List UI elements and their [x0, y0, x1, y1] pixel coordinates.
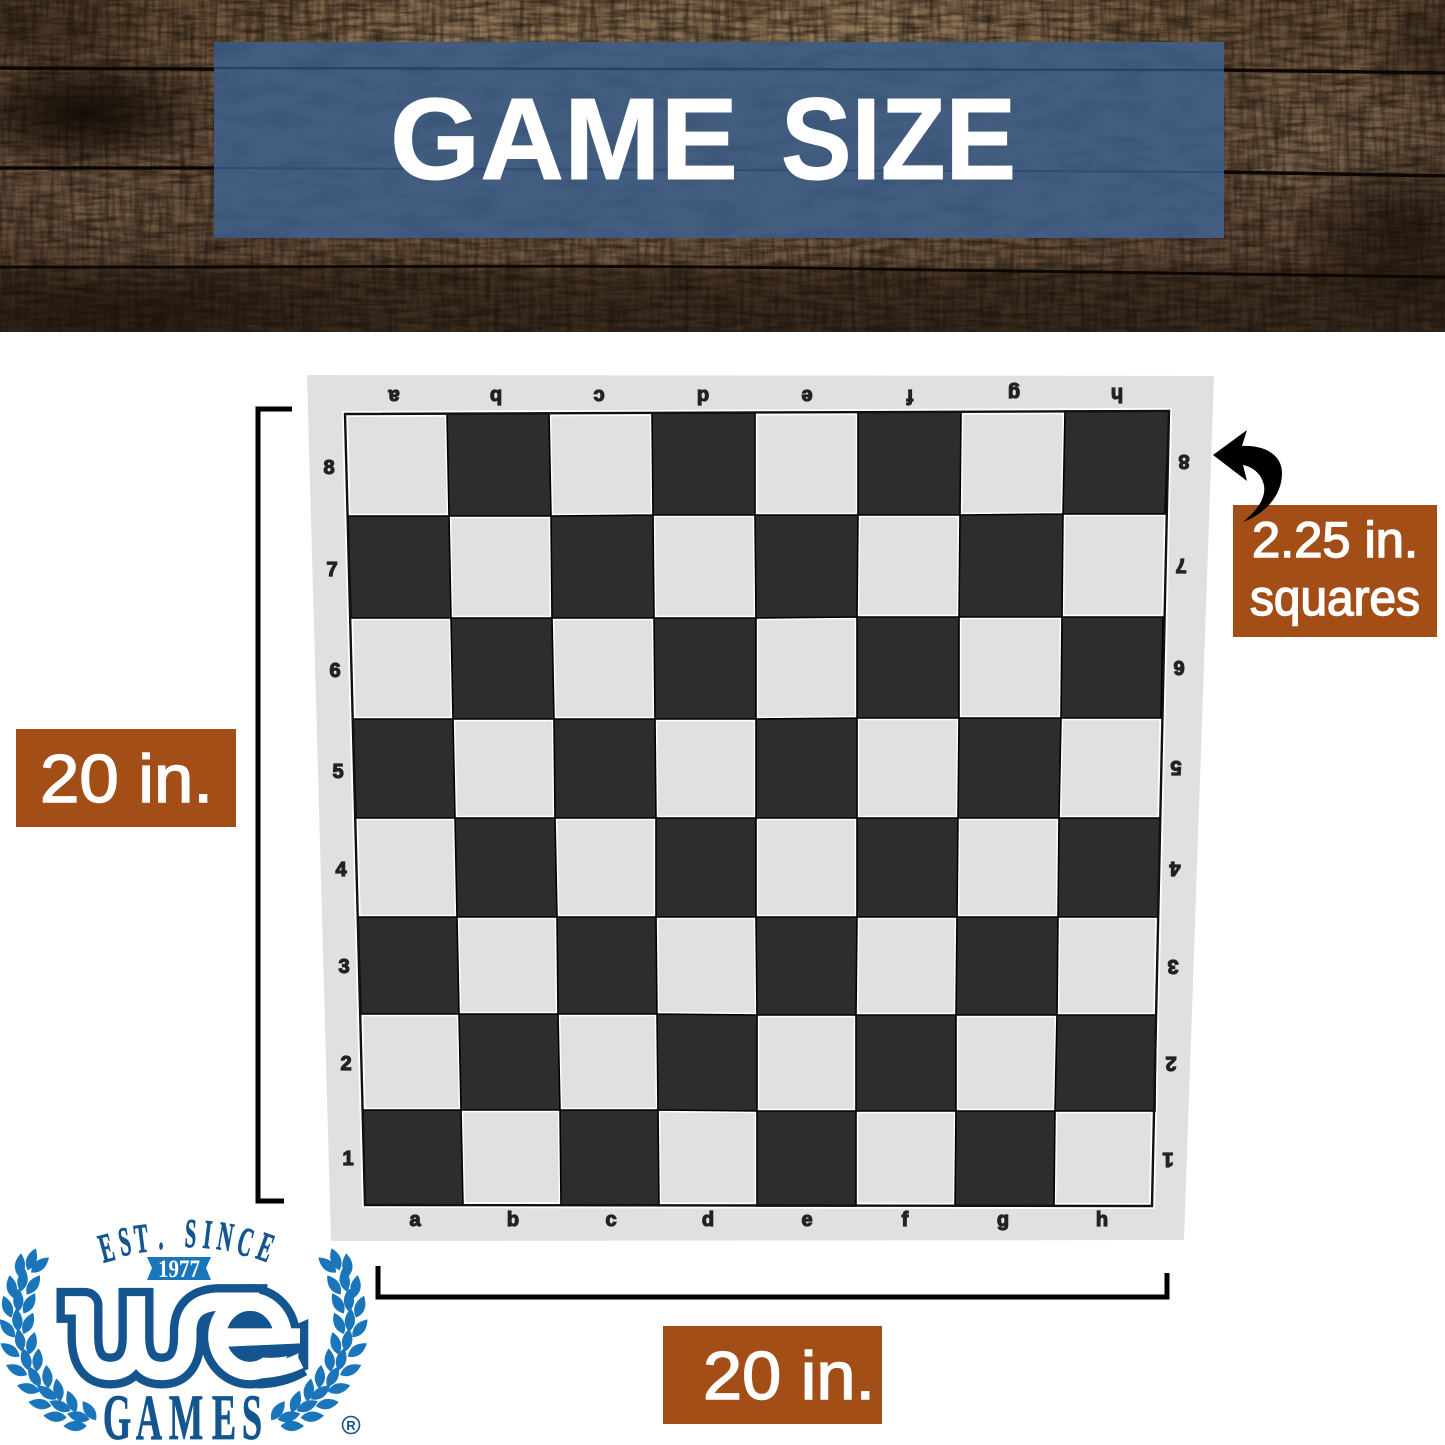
callout: square size: 2.25 in. — [1252, 512, 1418, 568]
top file letters (upside down): f — [906, 385, 913, 407]
logo EST. SINCE: S — [184, 1211, 198, 1257]
top file letters (upside down) — [388, 382, 1123, 407]
bottom file letters: b — [507, 1209, 519, 1231]
board sheet — [307, 375, 1214, 1241]
left rank numbers: 2 — [340, 1053, 352, 1075]
left rank numbers: 3 — [338, 956, 350, 978]
header: wood plank background — [0, 0, 1445, 350]
logo laurels — [0, 1247, 371, 1431]
top file letters (upside down): e — [801, 385, 813, 407]
logo: WE Games — [0, 1211, 371, 1445]
logo EST. SINCE: . — [158, 1214, 164, 1259]
logo EST. SINCE — [94, 1211, 280, 1273]
right rank numbers (upside down): 3 — [1167, 955, 1179, 977]
right rank numbers (upside down): 4 — [1169, 857, 1181, 879]
arrow to square — [1213, 430, 1282, 522]
callout: 20 in. width: 20 in. — [703, 1338, 875, 1414]
dark squares — [348, 411, 1169, 1206]
logo registered mark — [342, 1416, 360, 1434]
title text: GAME — [390, 74, 738, 204]
logo EST. SINCE: C — [232, 1219, 258, 1267]
bottom file letters: h — [1096, 1209, 1108, 1231]
left rank numbers: 8 — [323, 457, 335, 479]
left rank numbers: 5 — [332, 761, 344, 783]
right rank numbers (upside down): 1 — [1162, 1148, 1174, 1170]
top file letters (upside down): h — [1111, 383, 1123, 405]
right rank numbers (upside down): 7 — [1175, 554, 1187, 576]
top file letters (upside down): d — [697, 385, 709, 407]
bottom file letters: a — [409, 1209, 421, 1231]
callout: square size — [1233, 505, 1437, 637]
left rank numbers: 4 — [335, 859, 347, 881]
right rank numbers (upside down): 6 — [1173, 656, 1185, 678]
logo GAMES — [103, 1382, 262, 1445]
callout: square size: squares — [1250, 570, 1420, 626]
callout: 20 in. height: 20 in. — [40, 741, 213, 817]
grid border — [345, 411, 1169, 1206]
left rank numbers: 7 — [326, 559, 338, 581]
right rank numbers (upside down): 5 — [1170, 756, 1182, 778]
bottom file letters: c — [605, 1209, 617, 1231]
logo 1977 ribbon: 1977 — [158, 1256, 200, 1283]
callout: 20 in. height — [16, 729, 236, 827]
callout: 20 in. width — [663, 1326, 882, 1424]
top file letters (upside down): b — [490, 385, 502, 407]
right rank numbers (upside down) — [1162, 450, 1190, 1170]
bottom file letters: g — [997, 1209, 1009, 1231]
left rank numbers: 1 — [342, 1148, 354, 1170]
title text: SIZE — [781, 74, 1016, 204]
logo EST. SINCE: E — [251, 1224, 280, 1272]
top file letters (upside down): c — [593, 385, 605, 407]
title banner — [214, 42, 1224, 238]
right rank numbers (upside down): 2 — [1165, 1052, 1177, 1074]
top file letters (upside down): a — [388, 385, 400, 407]
top file letters (upside down): g — [1008, 382, 1020, 404]
logo EST. SINCE: E — [94, 1225, 119, 1273]
bottom file letters — [409, 1209, 1108, 1231]
right rank numbers (upside down): 8 — [1178, 450, 1190, 472]
left rank numbers — [323, 457, 354, 1170]
logo EST. SINCE: S — [115, 1219, 134, 1266]
width bracket — [378, 1266, 1167, 1297]
playing grid — [345, 411, 1169, 1206]
height bracket — [258, 409, 292, 1201]
logo WE wordmark — [74, 1302, 308, 1374]
bottom file letters: f — [902, 1209, 909, 1231]
bottom file letters: e — [801, 1209, 813, 1231]
left rank numbers: 6 — [329, 660, 341, 682]
logo EST. SINCE: T — [132, 1216, 151, 1263]
chess board — [307, 375, 1214, 1241]
dark square outlines — [348, 411, 1169, 1206]
logo EST. SINCE: N — [214, 1214, 236, 1261]
logo registered mark: R — [346, 1418, 356, 1433]
bottom file letters: d — [702, 1209, 714, 1231]
title text — [390, 74, 1016, 204]
logo EST. SINCE: I — [201, 1212, 214, 1259]
